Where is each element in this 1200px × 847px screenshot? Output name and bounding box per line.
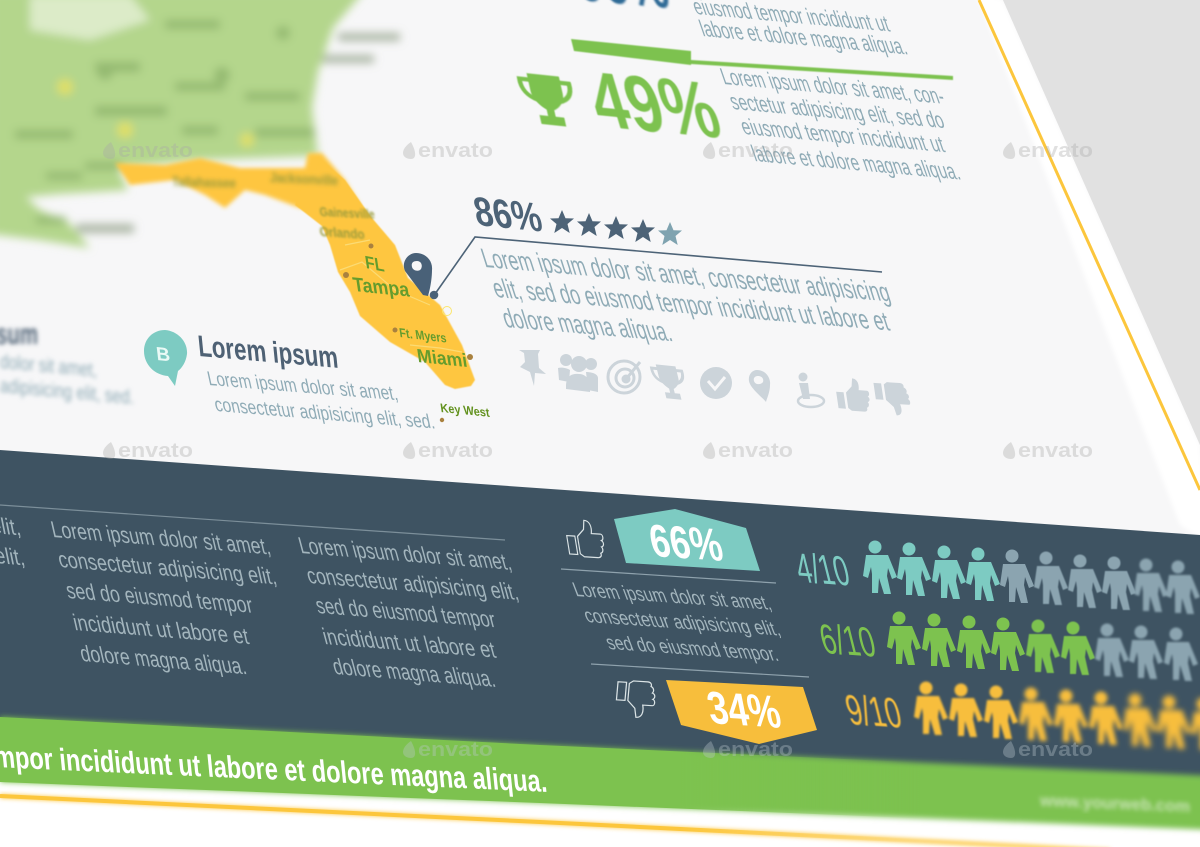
icon: B speech marker: B [155, 344, 171, 366]
column 2 paragraph: consectetur adipisicing elit, [303, 562, 521, 605]
label: Miami: Miami [416, 346, 469, 372]
white margin below footer [0, 770, 1200, 847]
icon: people group [558, 354, 598, 392]
column fragment left [0, 512, 27, 570]
pictogram row: 9/10 [841, 682, 1200, 751]
icon: trophy [518, 72, 579, 128]
heading: Lorem ipsum: Lorem ipsum [196, 330, 340, 375]
blurred city labels: Jacksonville [270, 169, 338, 188]
paper edge [975, 0, 1200, 545]
paragraph: rating text: elit, sed do eiusmod tempor incididunt ut labore et [488, 273, 893, 336]
dark band: text columns [0, 505, 521, 692]
column 1 paragraph: consectetur adipisicing elit, [55, 546, 279, 589]
column 1 paragraph: incididunt ut labore et [70, 609, 252, 649]
icon: thumbs down outline [615, 680, 656, 718]
pictogram row: 6/10 [815, 612, 1198, 681]
icon: person on marker [798, 372, 824, 407]
legend description: Lorem ipsum dolor sit amet, [205, 368, 400, 405]
rule above columns [0, 505, 505, 540]
column 1 paragraph: dolore magna aliqua. [77, 640, 249, 679]
people icons [887, 612, 1198, 681]
paragraph: labore et dolore magna aliqua. [748, 142, 964, 185]
icon: check badge [700, 367, 732, 399]
paragraph: rating text: dolore magna aliqua. [498, 303, 676, 347]
description fragment: dolor sit amet, [0, 351, 97, 382]
footer website, out of focus: www.yourweb.com [1039, 791, 1190, 816]
column 1 paragraph: sed do eiusmod tempor [63, 577, 255, 618]
icon: map pin [404, 253, 432, 296]
blurred city labels [172, 169, 375, 242]
column 1 paragraph: Lorem ipsum dolor sit amet, [48, 516, 273, 559]
watermarks [103, 140, 1093, 761]
dark band panel [0, 450, 1200, 795]
green footer banner [0, 717, 1200, 830]
description fragment [0, 351, 134, 409]
people icons [914, 682, 1200, 751]
description fragment: adipisicing elit, sed. [0, 375, 134, 409]
icon row [519, 350, 912, 416]
legend description [205, 368, 437, 434]
legend description: consectetur adipisicing elit, sed. [212, 394, 437, 434]
pictogram row: 4/10 [791, 540, 1200, 614]
legend item A, out of focus [0, 318, 134, 409]
backdrop: grey surface [1003, 0, 1200, 445]
column 1 paragraph [48, 516, 279, 679]
star rating [550, 210, 682, 245]
badge: 34%: 34% [703, 681, 785, 738]
region: neighbouring states [0, 0, 400, 248]
icon: thumbs up [834, 377, 872, 412]
map: south-east United States [0, 0, 491, 422]
icon: location marker [749, 370, 770, 402]
region: Florida [115, 153, 491, 422]
rating block [469, 187, 894, 347]
badge: 66%: 66% [645, 514, 727, 571]
blurred city labels: Orlando [319, 223, 366, 242]
label: Tampa: Tampa [351, 274, 411, 302]
paragraph: Lorem ipsum dolor sit amet, con- [717, 65, 948, 110]
green heading bar and rule [571, 39, 953, 80]
repaint of the grey surface edge [1003, 0, 1200, 445]
column 2 paragraph: dolore magna aliqua. [329, 653, 498, 692]
yellow page border right [979, 0, 1200, 490]
paragraph fragment [689, 0, 911, 60]
rule [561, 569, 776, 583]
icon: target [608, 361, 640, 393]
people icons [863, 540, 1200, 614]
connector line from pin to 86% block [430, 237, 882, 298]
fraction 9/10: 9/10 [841, 687, 906, 738]
icon: thumbs up outline [564, 519, 606, 558]
column 2 paragraph: Lorem ipsum dolor sit amet, [295, 532, 514, 575]
paragraph: consectetur adipisicing elit, [580, 605, 784, 640]
top text block fragment [565, 0, 911, 60]
fraction 6/10: 6/10 [815, 616, 880, 667]
heading: 86%: 86% [469, 187, 546, 241]
badge: 34% [666, 680, 817, 744]
fraction 4/10: 4/10 [791, 545, 854, 595]
49% block [518, 39, 964, 185]
paragraph fragment: labore et dolore magna aliqua. [696, 17, 911, 60]
blurred city labels: Tallahassee [172, 173, 236, 191]
poll block [561, 509, 817, 744]
paragraph: rating text [477, 243, 894, 347]
yellow page border bottom [0, 796, 1110, 847]
column 2 paragraph: incididunt ut labore et [319, 623, 499, 663]
rule [591, 664, 809, 677]
paragraph: sectetur adipisicing elit, sed do [726, 90, 948, 134]
paragraph: Lorem ipsum dolor sit amet, [569, 579, 775, 615]
paragraph [717, 65, 964, 185]
paragraph: eiusmod tempor incididunt ut [737, 115, 948, 158]
icon: push pin [519, 350, 546, 386]
badge: 66% [614, 509, 760, 571]
icon: thumbs down [873, 381, 912, 416]
paragraph: sed do eiusmod tempor. [602, 632, 782, 666]
footer slogan: mpor incididunt ut labore et dolore magna aliqua. [0, 739, 549, 799]
figure: 49%: 49% [579, 55, 730, 156]
paragraph [569, 579, 784, 666]
blurred city labels: Gainesville [319, 204, 375, 222]
label: FL: FL [363, 251, 386, 276]
label: Key West: Key West [439, 401, 491, 420]
column 2 paragraph [295, 532, 521, 692]
column 2 paragraph: sed do eiusmod tempor [312, 592, 498, 632]
paragraph: rating text: Lorem ipsum dolor sit amet, consectetur adipisicing [477, 243, 894, 307]
icon: B speech marker [144, 330, 187, 386]
icon: trophy outline [650, 364, 689, 401]
label: Ft. Myers: Ft. Myers [398, 325, 447, 346]
legend item B [144, 330, 437, 434]
